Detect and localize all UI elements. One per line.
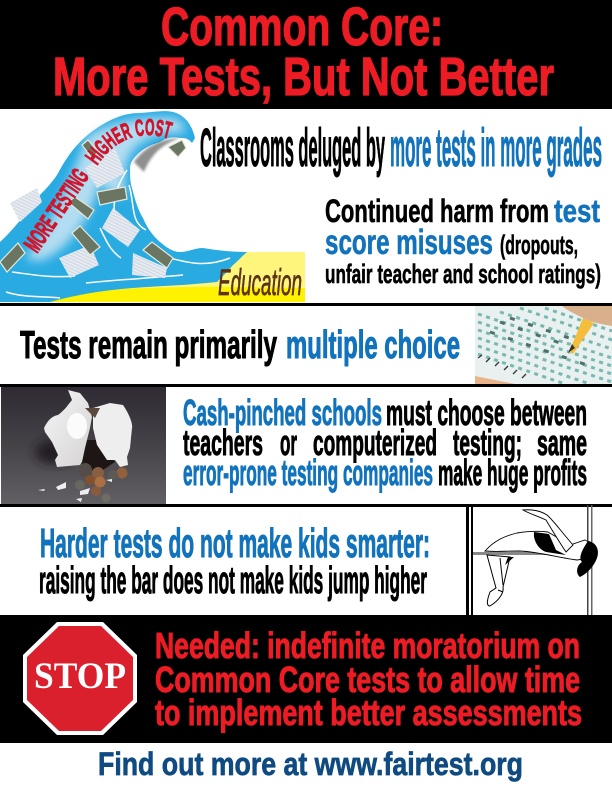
text: continued harm <box>325 193 601 289</box>
text: cash-pinched schools: teachers <box>183 422 263 463</box>
jumper arm <box>523 510 573 552</box>
label: more testing: MORE TESTING <box>19 164 95 257</box>
divider <box>0 504 612 507</box>
text: continued harm: test <box>554 193 600 229</box>
jumper legs <box>487 555 510 606</box>
label: education: Education <box>218 262 302 303</box>
coins <box>38 463 128 502</box>
text: tests remain multiple choice: Tests remain primarily <box>20 324 277 367</box>
divider <box>0 303 612 306</box>
divider <box>0 384 612 387</box>
icon: stop sign <box>23 622 137 735</box>
text: cash-pinched schools <box>183 392 587 493</box>
title banner <box>0 0 612 109</box>
footer link: Find out more at www.fairtest.org <box>98 746 523 782</box>
jumper hair <box>577 541 598 577</box>
photo: broken piggy bank <box>1 387 166 504</box>
text: cash-pinched schools: testing; <box>453 422 522 463</box>
panel: cash-pinched schools <box>1 387 587 504</box>
dollar bills <box>0 140 186 272</box>
panel: moratorium <box>0 615 612 743</box>
photo: answer sheet and pencil <box>475 306 612 384</box>
jumper body <box>485 531 593 560</box>
label: higher cost: HIGHER COST <box>84 118 174 166</box>
panel: wave and more tests <box>0 111 602 303</box>
text: cash-pinched schools: or <box>280 422 297 463</box>
paper sheets <box>10 148 167 278</box>
illustration: wave over education <box>0 111 305 303</box>
panel: multiple choice <box>20 306 612 384</box>
illustration: high jumper <box>466 505 598 615</box>
text: needed moratorium <box>155 625 582 733</box>
text: cash-pinched schools: Cash-pinched schools <box>183 392 382 433</box>
text: cash-pinched schools: computerized <box>313 422 437 463</box>
panel: harder tests <box>39 505 598 615</box>
text: continued harm: score misuses <box>325 223 493 262</box>
text: harder tests <box>39 520 430 602</box>
icon: stop sign: STOP <box>34 656 126 697</box>
text: tests remain multiple choice: multiple choice <box>286 324 460 367</box>
